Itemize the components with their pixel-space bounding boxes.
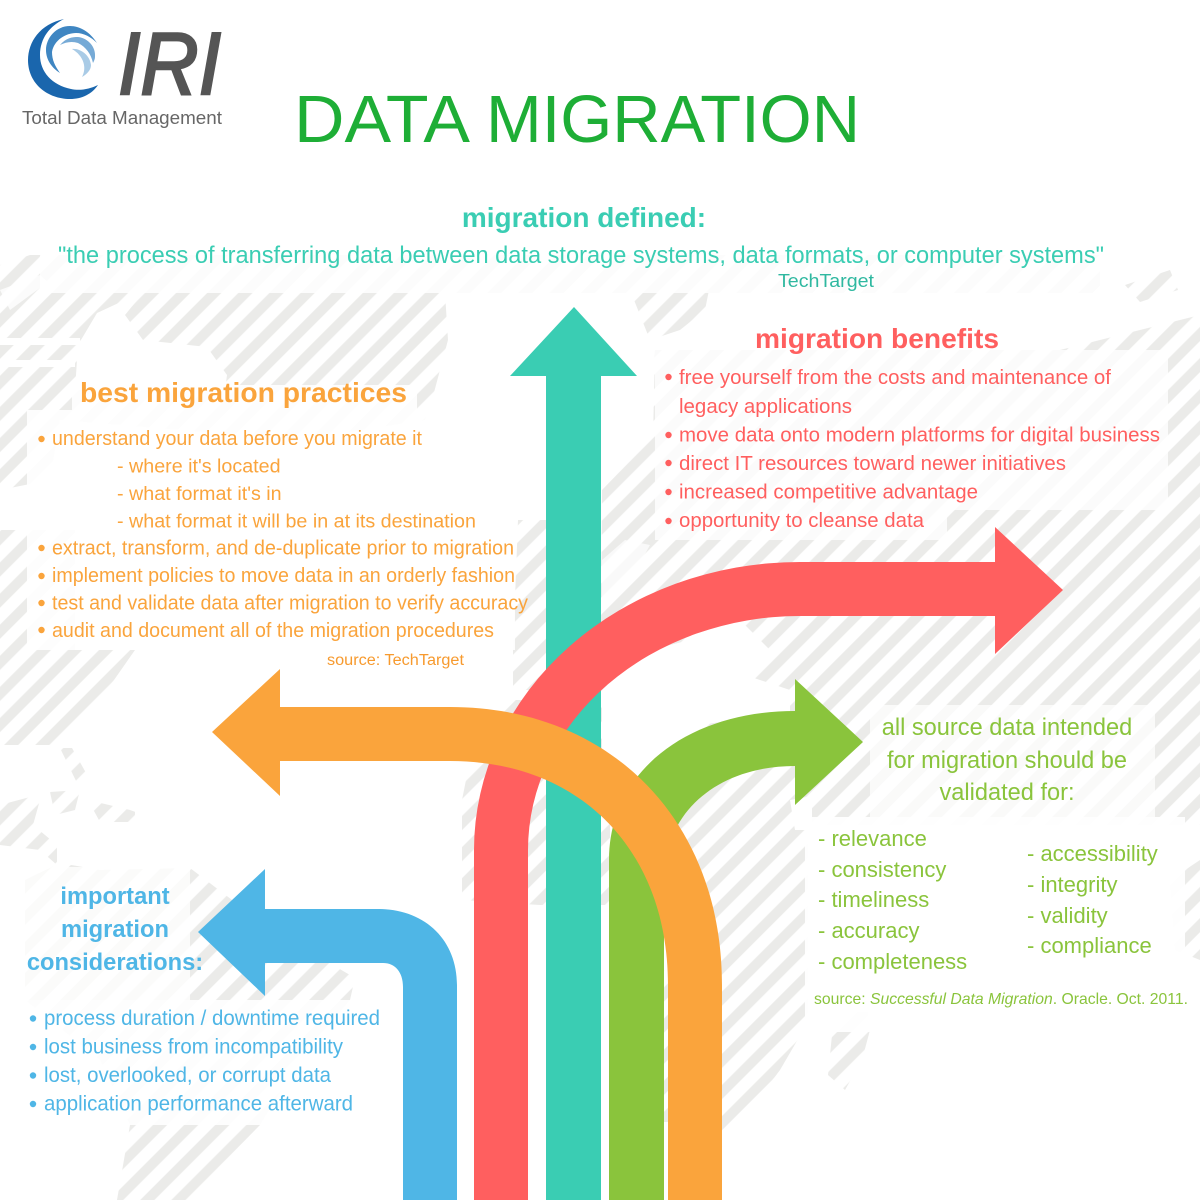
validation list right	[1027, 841, 1158, 958]
arrow: red right	[474, 527, 1063, 1200]
practices list: - where it's located	[117, 456, 281, 478]
considerations heading: considerations:	[27, 950, 203, 976]
practices list: implement policies to move data in an orderly fashion	[52, 565, 515, 587]
benefits list	[665, 367, 1160, 532]
best migration practices	[38, 377, 528, 669]
validation intro: all source data intended	[882, 715, 1132, 741]
panel: validation list backing	[805, 817, 1185, 1032]
title: DATA	[294, 82, 470, 157]
validation list left: - consistency	[818, 857, 946, 882]
logo: IRI	[22, 14, 222, 128]
validation list left: - relevance	[818, 826, 927, 851]
practices list: audit and document all of the migration procedures	[52, 620, 494, 642]
definition block	[58, 202, 1104, 291]
considerations list: lost, overlooked, or corrupt data	[44, 1064, 331, 1087]
practices list: - what format it will be in at its destination	[117, 510, 476, 532]
validation intro: validated for:	[939, 780, 1075, 806]
validation list left: - completeness	[818, 949, 967, 974]
practices list: extract, transform, and de-duplicate prior to migration	[52, 538, 514, 560]
icon: swirl	[28, 19, 98, 99]
considerations list: lost business from incompatibility	[44, 1036, 343, 1058]
panel: considerations list backing	[17, 1000, 387, 1125]
panel: considerations heading backing	[25, 867, 190, 1000]
validation list left	[818, 826, 967, 974]
validation intro	[882, 715, 1132, 806]
panel: validation intro backing	[870, 705, 1155, 817]
benefits list: move data onto modern platforms for digital business	[679, 424, 1160, 446]
panel: definition backing	[40, 235, 1105, 293]
validation block	[814, 715, 1188, 1008]
considerations heading	[27, 884, 203, 976]
validation list right: - integrity	[1027, 872, 1117, 897]
arrow: orange left	[212, 669, 722, 1200]
benefits list: free yourself from the costs and maintenance of	[679, 367, 1111, 389]
migration benefits	[665, 323, 1160, 532]
benefits list: legacy applications	[679, 396, 852, 418]
practices list: test and validate data after migration to verify accuracy	[52, 592, 528, 614]
panel: lower practices white area	[135, 650, 455, 865]
validation source: source: Successful Data Migration. Oracle. Oct. 2011.	[814, 991, 1188, 1008]
world map stripe background	[0, 255, 1200, 1200]
validation list right: - accessibility	[1027, 841, 1158, 866]
arrow: teal up	[510, 307, 637, 1200]
logo tagline: Total Data Management	[22, 107, 222, 128]
definition source: TechTarget	[778, 270, 874, 291]
considerations list: process duration / downtime required	[44, 1007, 380, 1030]
benefits heading: migration benefits	[755, 323, 999, 354]
panel: benefits backing	[655, 320, 1168, 540]
validation list right: - compliance	[1027, 933, 1152, 958]
considerations list: application performance afterward	[44, 1092, 353, 1116]
title: MIGRATION	[486, 82, 860, 157]
definition quote: "the process of transferring data between data storage systems, data formats, or computer systems"	[58, 242, 1104, 269]
benefits list: opportunity to cleanse data	[679, 510, 925, 532]
practices list: - what format it's in	[117, 483, 282, 505]
benefits list: direct IT resources toward newer initiatives	[679, 453, 1066, 475]
validation list left: - timeliness	[818, 887, 929, 912]
practices heading: best migration practices	[80, 377, 407, 408]
validation intro: for migration should be	[887, 748, 1127, 774]
practices list	[38, 428, 528, 642]
considerations block	[27, 884, 380, 1116]
definition heading: migration defined:	[462, 202, 706, 233]
considerations list	[30, 1007, 380, 1116]
considerations heading: important	[60, 884, 170, 910]
panel: best practices backing	[27, 385, 515, 650]
benefits list: increased competitive advantage	[679, 482, 978, 504]
practices source: source: TechTarget	[327, 652, 465, 669]
validation list left: - accuracy	[818, 918, 919, 943]
practices list: understand your data before you migrate it	[52, 428, 422, 450]
considerations heading: migration	[61, 917, 169, 943]
validation list right: - validity	[1027, 903, 1108, 928]
arrow: green right	[609, 679, 863, 1200]
arrow: blue left	[198, 869, 457, 1200]
logo wordmark: IRI	[118, 14, 221, 113]
